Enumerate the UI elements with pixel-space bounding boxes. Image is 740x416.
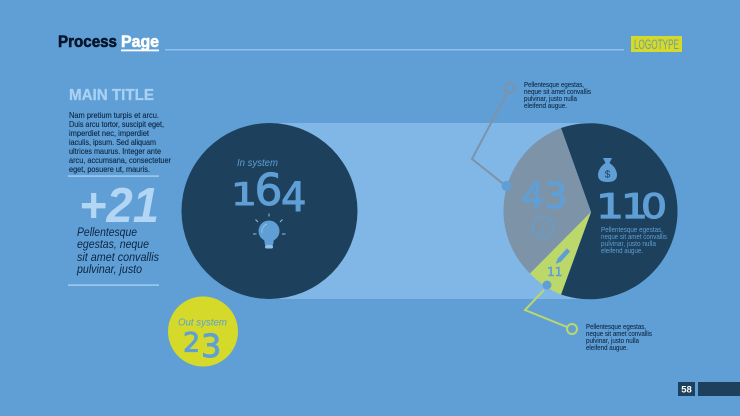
slice description [601,225,667,255]
circle: in system: 6 [254,165,282,216]
slice description: eleifend augue. [601,246,643,255]
body text: arcu, accumsana, consectetuer [69,156,171,165]
callout text: bottom [586,322,652,352]
pie slice: 43 [503,128,591,274]
callout text: bottom: Pellentesque egestas, [586,322,646,331]
circle: in system: 1 [231,177,257,213]
callout text: bottom: neque sit amet convallis [586,329,652,338]
body text: imperdiet nec, imperdiet [69,129,150,138]
circle: in system: 4 [281,175,306,221]
stat description: Pellentesque [77,227,137,239]
value 110: 1 [621,187,648,227]
connecting band [269,123,591,299]
value 110: 1 [596,187,624,227]
body text: eget, posuere ut, mauris. [69,165,150,174]
icon: clock [532,216,554,238]
pie chart [503,123,678,299]
value 110 [596,187,667,227]
value 11: 11 [547,264,562,279]
icon: light bulb [253,214,286,248]
leader line: bottom callout [525,280,577,334]
body text: ultrices maurus. Integer ante [69,147,161,156]
slice description: pulvinar, justo nulla [601,239,657,248]
callout text: top: eleifend augue. [524,101,567,110]
title [58,33,159,51]
circle: out system: 2 [183,328,200,358]
main title: MAIN TITLE [69,87,154,104]
callout text: bottom: eleifend augue. [586,343,628,352]
circle: out system: 3 [201,327,221,365]
title: Process [58,33,117,51]
logotype badge [631,36,682,52]
footer bar [698,382,740,396]
callout text: top: neque sit amet convallis [524,87,591,96]
icon: money bag: $ [605,170,611,180]
callout text: top: pulvinar, justo nulla [524,94,577,103]
icon: pencil [556,249,570,263]
icon: money bag [598,158,617,182]
circle: out system: Out system [178,318,227,328]
body text: Duis arcu tortor, suscipit eget, [69,120,164,129]
slice description: neque sit amet convallis [601,232,667,241]
body text [69,111,171,174]
logotype badge: LOGOTYPE [634,37,679,52]
stat: +21: +21 [79,179,159,233]
leader line: top callout [472,83,514,191]
callout text: bottom: pulvinar, justo nulla [586,336,639,345]
body text: Nam pretium turpis et arcu. [69,111,159,120]
title: Page [121,33,159,51]
slice description: Pellentesque egestas, [601,225,663,234]
callout text: top [524,80,591,110]
pie slice: 110 [561,123,678,299]
value 110: 0 [641,187,667,227]
circle: in system: In system [237,158,278,169]
stat description [76,227,159,276]
page number: 58 [681,384,692,396]
stat description: sit amet convallis [77,252,159,264]
stat description: egestas, neque [77,239,149,251]
callout text: top: Pellentesque egestas, [524,80,584,89]
page number [678,382,695,396]
circle: out system [168,296,238,366]
stat description: pulvinar, justo [76,264,143,276]
value 43: 43 [522,176,567,217]
body text: iaculis, ipsum. Sed aliquam [69,138,156,147]
pie slice: 11 [530,212,591,294]
circle: in system [182,123,358,299]
